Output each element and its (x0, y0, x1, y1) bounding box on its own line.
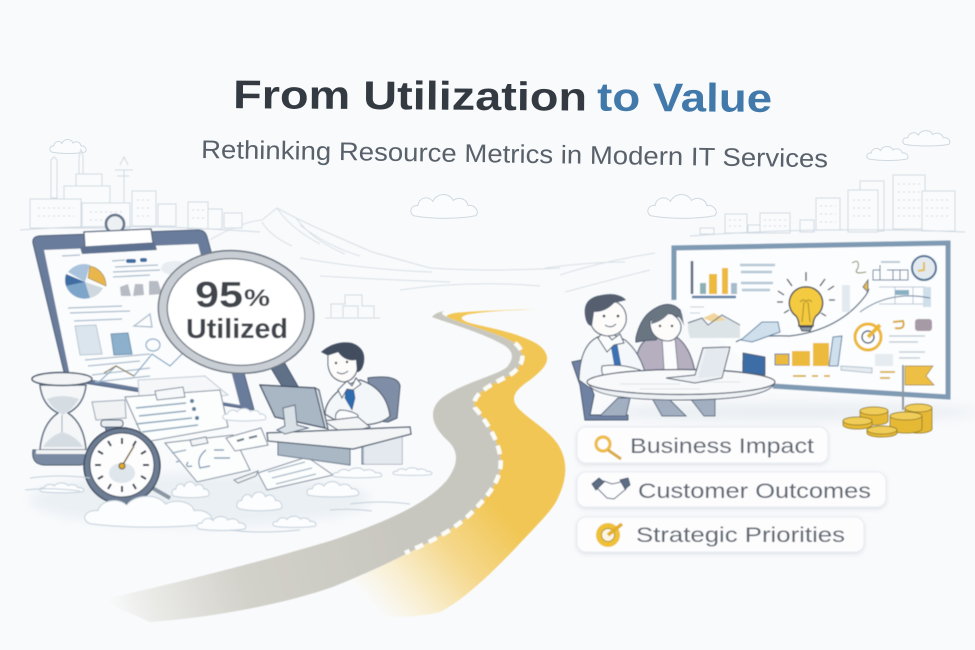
laptop (666, 347, 730, 383)
hands and keyboard (336, 410, 358, 421)
flag and coins (843, 365, 934, 437)
chair (368, 377, 400, 422)
title: to Value (597, 76, 772, 121)
magnifying glass: Utilized (186, 313, 288, 344)
lightbulb (777, 272, 835, 331)
title (233, 73, 772, 121)
magnifying glass: % (244, 285, 270, 312)
bar chart panel (692, 261, 737, 297)
blue book (743, 353, 765, 375)
road: yellow value lane (290, 309, 565, 617)
small dashboard details (793, 256, 936, 378)
coin stacks (843, 404, 932, 437)
snow-like paper clouds (25, 408, 432, 532)
subtitle: Rethinking Resource Metrics in Modern IT Services (201, 136, 828, 173)
right city skyline (690, 175, 965, 236)
small tag (226, 428, 268, 451)
stopwatch (84, 420, 170, 504)
pill: business impact: Business Impact (630, 434, 814, 458)
ground wash (600, 403, 975, 421)
office worker at desk (260, 342, 411, 465)
round table (588, 382, 775, 400)
woman (635, 304, 695, 372)
title: From Utilization (233, 73, 587, 120)
stat: 95% utilized: 95 (195, 274, 243, 315)
pill: customer outcomes (577, 472, 886, 507)
desk (278, 436, 402, 465)
left scene: utilization (25, 215, 432, 532)
pill: strategic priorities (577, 517, 864, 552)
clipboard (33, 215, 254, 410)
road: grey utilization lane (100, 311, 522, 622)
man (572, 294, 656, 420)
left city skyline (20, 149, 260, 232)
mountains (210, 208, 655, 318)
paper stack (92, 376, 333, 490)
road: dashed centre line (405, 343, 522, 553)
head (328, 348, 358, 382)
target icon (855, 324, 881, 350)
note sheet (165, 435, 250, 482)
checklist sheet (125, 390, 228, 442)
ground wash (30, 474, 370, 526)
report sheet (258, 457, 333, 490)
growth arrow (736, 280, 869, 342)
dashboard screen (673, 243, 949, 398)
line area chart (688, 315, 740, 338)
magnifying glass (150, 241, 322, 396)
pill: business impact (577, 427, 828, 463)
rising yellow bars (775, 336, 842, 366)
pie chart (65, 264, 106, 299)
hourglass (32, 372, 92, 465)
pill: strategic priorities: Strategic Priorities (636, 523, 845, 547)
right scene: value (572, 243, 975, 552)
monitor (260, 385, 325, 428)
mini charts and report lines (62, 255, 160, 382)
legs and table base (600, 398, 715, 416)
two colleagues at table (572, 294, 775, 420)
pill: customer outcomes: Customer Outcomes (638, 479, 871, 503)
road (100, 309, 565, 622)
decorative sky clouds (50, 131, 950, 218)
